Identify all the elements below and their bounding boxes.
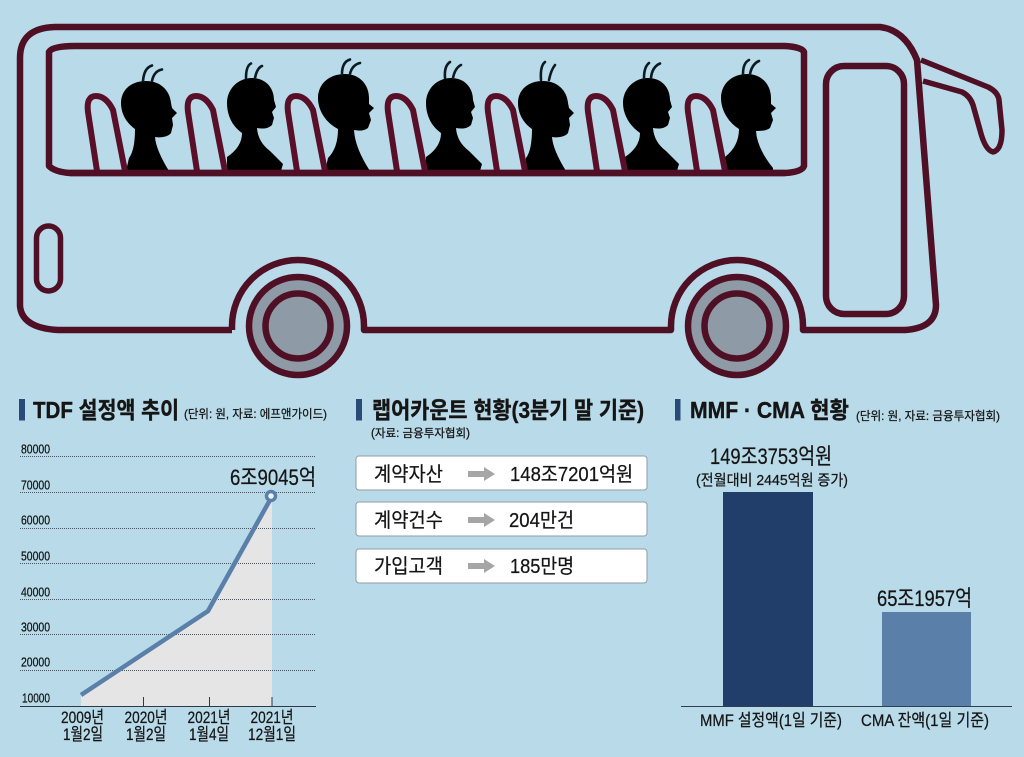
window floor line [70,170,785,176]
trend line [81,500,270,695]
y-axis labels: 70000 [21,478,50,492]
x-axis labels: 2020년 [124,708,168,727]
front wheel [688,277,786,375]
seats [88,96,725,171]
y-axis labels: 80000 [21,442,50,456]
row: contract assets: 148조7201억원 [510,463,633,486]
value: MMF: 149조3753억원 [710,444,832,469]
windshield mirror [921,60,1002,152]
unit note: (단위: 원, 자료: 에프앤가이드) [184,407,327,421]
x-axis labels: 2009년 [61,708,104,727]
row: contract assets: 계약자산 [374,463,443,486]
heading marker [19,399,25,420]
grid lines [20,456,316,670]
row: number of contracts: 계약건수 [374,509,443,532]
door [826,66,904,314]
row: subscribers: 185만명 [510,555,574,578]
panel: TDF line chart [19,397,327,744]
row: number of contracts [356,502,647,536]
x-axis labels: 2021년 [188,708,230,727]
x-axis labels [61,708,296,744]
bus body outline [20,27,936,330]
source note: (자료: 금융투자협회) [371,427,470,440]
window band [49,46,804,173]
x-axis labels: 1월2일 [126,725,166,744]
x-axis labels: 12월1일 [248,725,296,744]
x-axis labels: 1월2일 [63,725,103,744]
value: CMA: 65조1957억 [877,586,972,611]
heading: wrap account: 랩어카운트 현황(3분기 말 기준) [372,397,644,423]
y-axis labels [21,442,50,706]
unit note: (단위: 원, 자료: 금융투자협회) [856,409,1000,423]
heading marker [675,399,680,420]
end marker [266,492,276,500]
row: contract assets [356,456,647,490]
y-axis labels: 20000 [21,656,50,670]
bar: MMF [723,492,813,707]
x-axis labels: 1월4일 [189,725,229,744]
y-axis labels: 10000 [22,692,50,706]
bar: CMA [882,612,971,707]
x axis [20,697,316,706]
y-axis labels: 30000 [21,620,50,634]
area under line [81,496,272,706]
panel: wrap account status [356,397,647,583]
bus illustration [20,27,1002,375]
passengers silhouettes [121,74,776,171]
row: subscribers [356,549,647,583]
y-axis labels: 50000 [21,550,50,564]
note: MMF change: (전월대비 2445억원 증가) [696,472,848,489]
y-axis labels: 60000 [21,514,50,528]
row: subscribers: 가입고객 [374,555,443,578]
side hatch [36,226,60,291]
label: MMF: MMF 설정액(1일 기준) [700,711,842,730]
passenger hair strands [143,60,759,81]
y-axis labels: 40000 [21,586,50,600]
rear wheel [249,277,347,375]
row: number of contracts: 204만건 [509,509,574,532]
panel: MMF CMA bar chart [675,397,1012,730]
value label: 6조9045억 [230,465,316,490]
heading: MMF CMA: MMF · CMA 현황 [690,397,849,423]
label: CMA: CMA 잔액(1일 기준) [861,711,989,730]
heading marker [356,399,362,420]
x-axis labels: 2021년 [250,708,294,727]
heading: TDF: TDF 설정액 추이 [33,397,179,423]
axis [681,706,1012,708]
